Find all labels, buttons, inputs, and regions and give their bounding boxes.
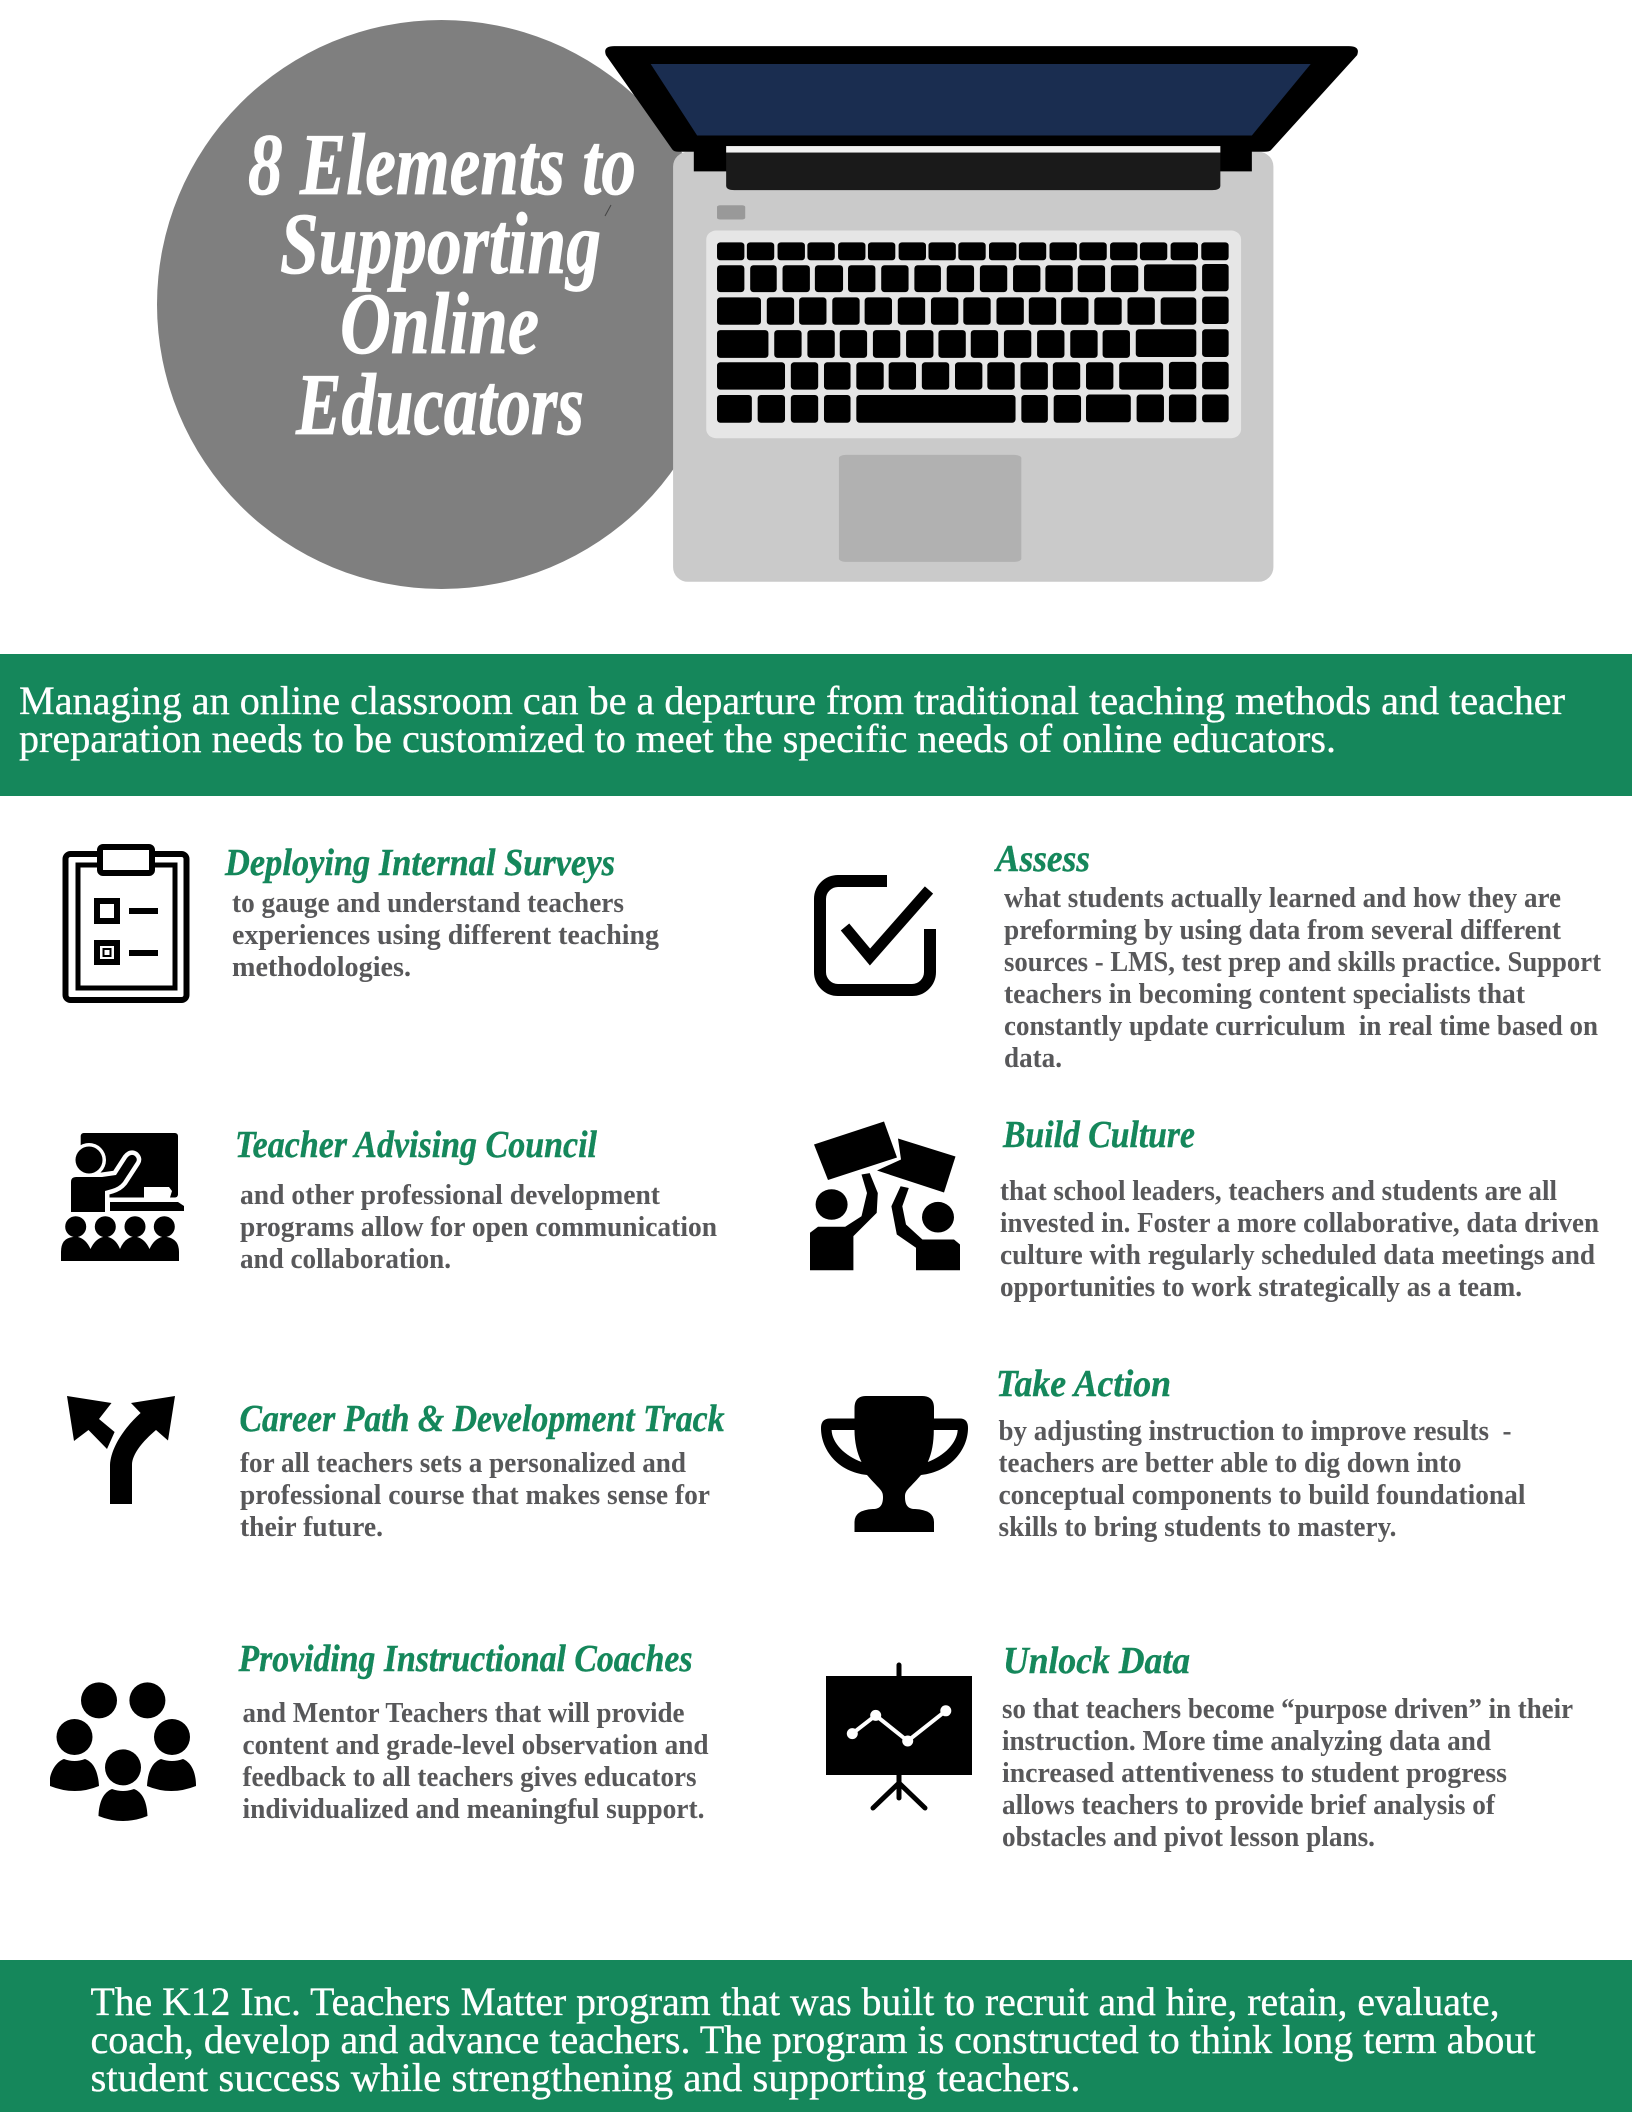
item: Providing Instructional Coaches: content and grade-level observation and: [242, 1729, 708, 1761]
icon: teacher at blackboard: [61, 1133, 184, 1261]
item: Unlock Data: [1002, 1640, 1573, 1853]
laptop base: [673, 152, 1273, 582]
title: Educators: [295, 357, 584, 454]
item: Career Path & Development Track: [240, 1398, 724, 1543]
keyboard: [706, 231, 1241, 438]
item: Unlock Data: Unlock Data: [1003, 1640, 1190, 1682]
item: Providing Instructional Coaches: [238, 1638, 708, 1825]
item: Providing Instructional Coaches: and Mentor Teachers that will provide: [242, 1697, 685, 1729]
item: Assess: [994, 838, 1601, 1074]
item: Build Culture: that school leaders, teachers and students are all: [1000, 1175, 1557, 1207]
icon: forked arrow: [67, 1396, 175, 1504]
item: Assess: preforming by using data from several different: [1004, 914, 1561, 946]
item: Deploying Internal Surveys: Deploying Internal Surveys: [224, 842, 615, 884]
title: Online: [340, 276, 539, 373]
item: Unlock Data: so that teachers become “purpose driven” in their: [1002, 1693, 1573, 1725]
title: 8 Elements to: [248, 117, 636, 214]
item: Unlock Data: obstacles and pivot lesson plans.: [1002, 1821, 1375, 1853]
icon: checkbox: [820, 881, 930, 990]
closing band: The K12 Inc. Teachers Matter program that was built to recruit and hire, retain, evaluate,: [90, 1979, 1500, 2024]
laptop screen: [605, 46, 1358, 190]
item: Assess: teachers in becoming content specialists that: [1004, 978, 1525, 1010]
intro band: preparation needs to be customized to meet the specific needs of online educators.: [19, 716, 1336, 761]
item: Unlock Data: allows teachers to provide brief analysis of: [1002, 1789, 1495, 1821]
item: Take Action: Take Action: [996, 1363, 1171, 1405]
item: Take Action: by adjusting instruction to improve results -: [998, 1415, 1512, 1447]
item: Providing Instructional Coaches: feedback to all teachers gives educators: [242, 1761, 696, 1793]
title circle: [157, 20, 726, 589]
item: Teacher Advising Council: programs allow for open communication: [240, 1211, 717, 1243]
icon: group of people: [50, 1682, 196, 1821]
item: Providing Instructional Coaches: Providing Instructional Coaches: [238, 1638, 692, 1680]
item: Build Culture: Build Culture: [1002, 1114, 1195, 1156]
item: Build Culture: invested in. Foster a more collaborative, data driven: [1000, 1207, 1599, 1239]
item: Take Action: conceptual components to build foundational: [998, 1479, 1526, 1511]
item: Assess: Assess: [994, 838, 1090, 880]
item: Unlock Data: increased attentiveness to student progress: [1002, 1757, 1507, 1789]
icon: laptop: [605, 46, 1358, 582]
icon: trophy: [821, 1396, 968, 1532]
closing band: [0, 1960, 1632, 2112]
item: Build Culture: culture with regularly scheduled data meetings and: [1000, 1239, 1595, 1271]
item: Teacher Advising Council: and collaboration.: [240, 1243, 451, 1275]
title: [248, 117, 636, 454]
item: Unlock Data: instruction. More time analyzing data and: [1002, 1725, 1491, 1757]
icon: clipboard: [66, 847, 186, 1000]
item: Assess: what students actually learned and how they are: [1004, 882, 1561, 914]
item: Deploying Internal Surveys: to gauge and understand teachers: [232, 887, 624, 919]
title: Supporting: [280, 196, 601, 293]
item: Take Action: teachers are better able to dig down into: [998, 1447, 1462, 1479]
item: Teacher Advising Council: [235, 1124, 717, 1275]
item: Teacher Advising Council: and other professional development: [240, 1179, 660, 1211]
item: Teacher Advising Council: Teacher Advising Council: [235, 1124, 597, 1166]
icon: presentation board chart: [826, 1665, 972, 1808]
item: Assess: data.: [1004, 1042, 1062, 1074]
power button: [717, 205, 745, 220]
item: Take Action: skills to bring students to mastery.: [998, 1511, 1396, 1543]
item: Deploying Internal Surveys: [224, 842, 659, 983]
trackpad: [839, 455, 1021, 562]
item: Assess: constantly update curriculum in real time based on: [1004, 1010, 1598, 1042]
item: Career Path & Development Track: for all teachers sets a personalized and: [240, 1447, 686, 1479]
item: Build Culture: opportunities to work strategically as a team.: [1000, 1271, 1522, 1303]
item: Providing Instructional Coaches: individualized and meaningful support.: [242, 1793, 704, 1825]
closing band: coach, develop and advance teachers. The program is constructed to think long term about: [90, 2017, 1536, 2062]
icon: raised signs: [810, 1122, 960, 1270]
item: Career Path & Development Track: their future.: [240, 1511, 383, 1543]
item: Take Action: [996, 1363, 1526, 1543]
item: Build Culture: [1000, 1114, 1599, 1303]
item: Deploying Internal Surveys: methodologies.: [232, 951, 411, 983]
item: Career Path & Development Track: Career Path & Development Track: [240, 1398, 724, 1440]
item: Career Path & Development Track: professional course that makes sense for: [240, 1479, 710, 1511]
intro band: Managing an online classroom can be a departure from traditional teaching methods and teacher: [19, 678, 1565, 723]
closing band: student success while strengthening and supporting teachers.: [90, 2055, 1080, 2100]
intro band: [0, 654, 1632, 796]
item: Deploying Internal Surveys: experiences using different teaching: [232, 919, 659, 951]
